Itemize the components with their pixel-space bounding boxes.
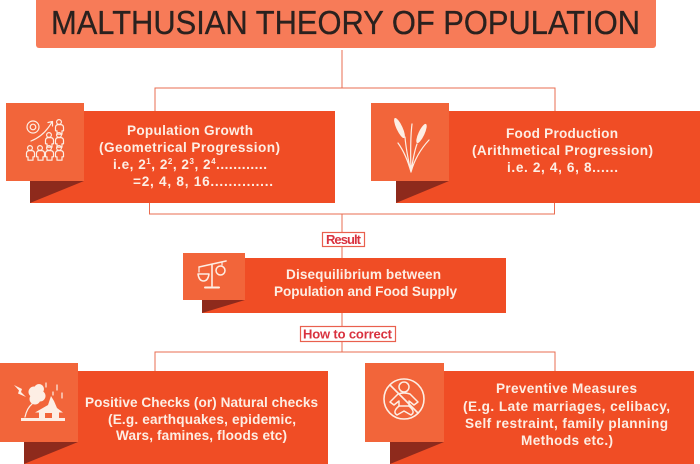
text: food production: i.e. 2, 4, 6, 8...... <box>507 160 618 175</box>
text: population growth: i.e, 2 <box>113 157 146 172</box>
text: food production: Food Production <box>506 126 618 141</box>
panel: disequilibrium <box>183 253 506 313</box>
label: how to correct: How to correct <box>303 326 393 342</box>
panel: positive checks <box>0 363 328 464</box>
text: population growth: , 2 <box>194 157 211 172</box>
text: disequilibrium <box>274 267 457 299</box>
text: disequilibrium: Disequilibrium between <box>286 267 441 282</box>
icon: population growth people and arrow <box>26 120 64 160</box>
text: population growth: Population Growth <box>127 123 253 138</box>
text: population growth <box>99 123 280 189</box>
panel: preventive measures <box>365 363 694 464</box>
icon: balance scale <box>198 261 226 288</box>
text: positive checks: Wars, famines, floods etc) <box>116 428 287 443</box>
text: population growth: , 2 <box>173 157 189 172</box>
text: population growth: =2, 4, 8, 16.............. <box>133 174 273 189</box>
text: preventive measures: Self restraint, family planning <box>465 416 668 431</box>
text: preventive measures <box>463 381 670 448</box>
panel: population growth <box>6 103 335 203</box>
text: population growth: 4 <box>211 157 216 166</box>
text: disequilibrium: Population and Food Supply <box>274 284 457 299</box>
title banner: MALTHUSIAN THEORY OF POPULATION <box>51 4 640 41</box>
text: preventive measures: (E.g. Late marriages, celibacy, <box>463 399 670 414</box>
icon: no baby <box>384 379 424 419</box>
panel: food production <box>371 103 700 203</box>
text: food production <box>472 126 653 175</box>
text: population growth: ............ <box>216 157 267 172</box>
connector: top panels to result <box>150 203 555 371</box>
text: preventive measures: Methods etc.) <box>521 433 613 448</box>
text: population growth: 3 <box>189 157 194 166</box>
text: population growth: , 2 <box>151 157 168 172</box>
icon: natural disaster <box>14 383 65 421</box>
text: positive checks <box>85 395 318 443</box>
text: food production: (Arithmetical Progression) <box>472 143 653 158</box>
text: positive checks: (E.g. earthquakes, epidemic, <box>108 412 296 427</box>
label: result: Result <box>326 232 362 247</box>
text: preventive measures: Preventive Measures <box>496 381 637 396</box>
text: positive checks: Positive Checks (or) Natural checks <box>85 395 318 410</box>
text: population growth: (Geometrical Progression) <box>99 140 280 155</box>
text: population growth: 1 <box>146 157 151 166</box>
text: population growth: 2 <box>168 157 173 166</box>
icon: wheat <box>392 117 429 172</box>
connector: title to top panels <box>155 50 555 111</box>
